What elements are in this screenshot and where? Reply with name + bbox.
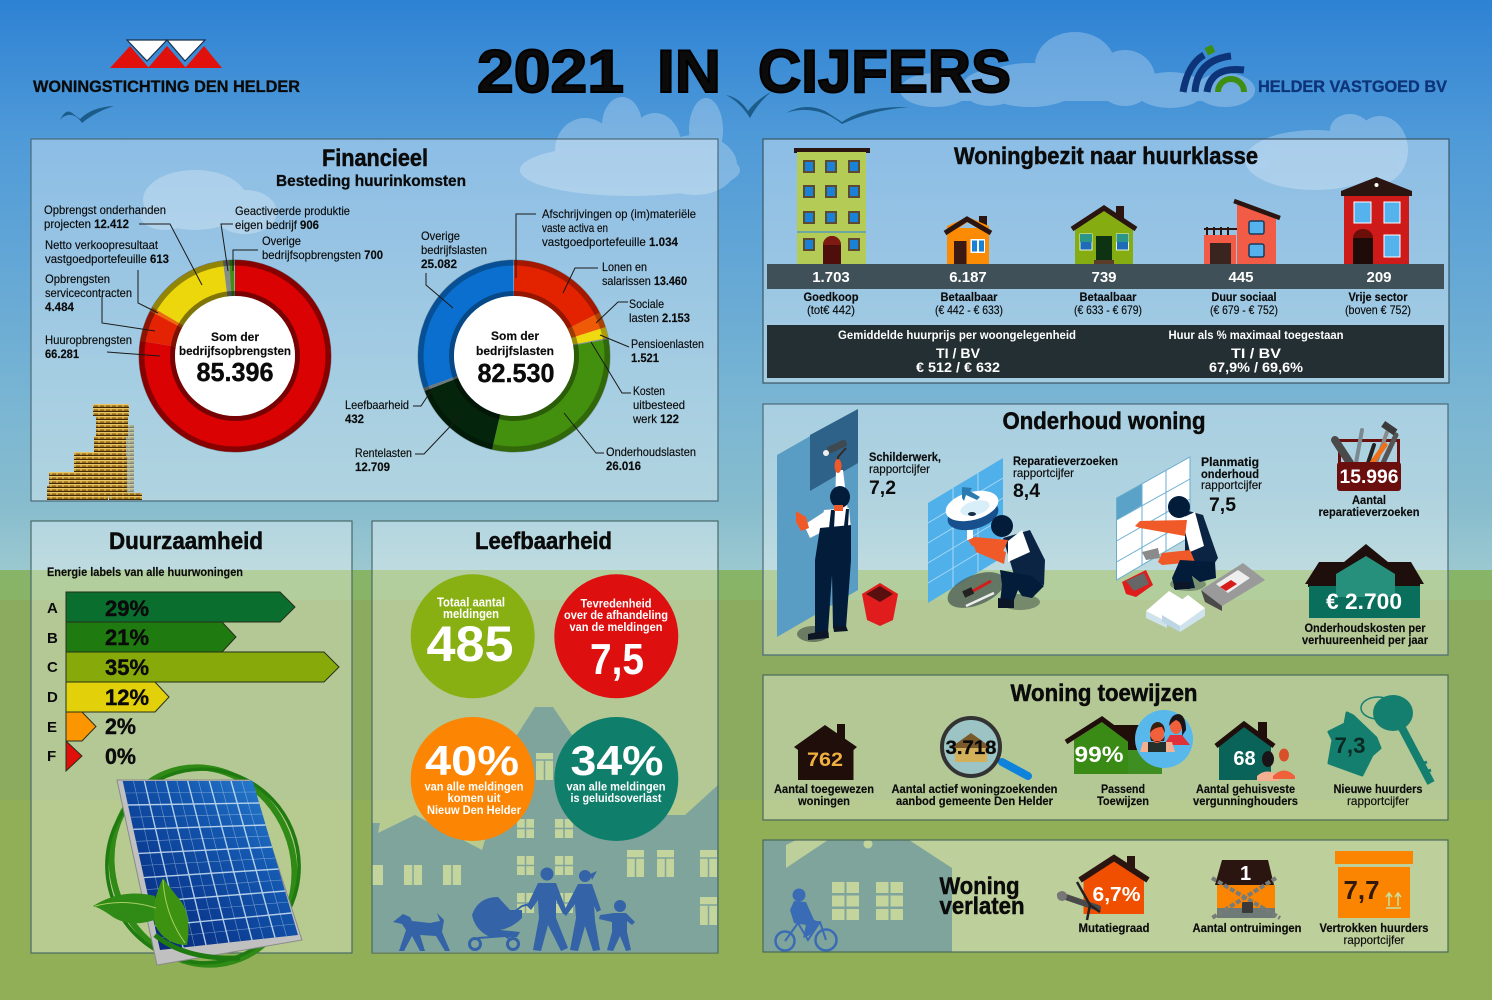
icon: green house [1072,206,1136,264]
circle: 40% Nieuw Den Helder: Nieuw Den Helder [427,803,521,817]
donut center: 82.530: 82.530 [478,358,554,388]
stat: 7,7 vertrokken huurders: 7,7 [1344,875,1380,905]
illustration: tiler [1116,457,1218,591]
text: schilderwerk: Schilderwerk, [869,450,941,464]
stat: 7,3 nieuwe huurders: 7,3 [1334,733,1366,758]
icon: modern coral house [1204,201,1280,264]
chart: energy labels: C [47,659,58,676]
chart: energy labels: F [47,748,56,765]
chart: energy labels: 35% [105,655,149,680]
stat: 7,3 nieuwe huurders: Nieuwe huurders [1334,782,1423,796]
panel: Onderhoud woning [763,404,1448,655]
number bar: 209 [1366,269,1392,286]
stat: 68 vergunninghouders [1193,722,1298,808]
illustration: plumber [928,458,1045,615]
donut center: 82.530 [476,329,554,388]
chart: energy labels: A [47,600,58,617]
text: reparatieverzoeken: Reparatieverzoeken [1013,454,1118,468]
icon: red house [1341,177,1412,264]
stat: 99% passend toewijzen: 99% [1074,742,1124,767]
donut center: 85.396: bedrijfsopbrengsten [179,344,291,358]
stat: 3.718 woningzoekenden: Aantal actief woningzoekenden [892,782,1058,796]
text: planmatig onderhoud: 7,5 [1209,495,1236,516]
icon: house € 2.700: verhuureenheid per jaar [1302,633,1428,647]
house silhouette [763,840,952,952]
circle: 40% Nieuw Den Helder [411,717,535,841]
heading: Financieel: Financieel [322,145,428,172]
icon: coin stacks [47,404,142,500]
panel: Woningbezit naar huurklasse [763,139,1449,383]
heading: Leefbaarheid: Leefbaarheid [475,528,612,555]
family silhouette [393,868,635,951]
bucket [862,583,898,626]
icon: orange house [945,216,991,264]
logo: Helder Vastgoed BV: HELDER VASTGOED BV [1258,77,1448,96]
circle: 34% geluidsoverlast: van alle meldingen [566,780,666,794]
labels: opbrengsten: bedrijfsopbrengsten 700 [262,248,383,262]
stat: 3.718 woningzoekenden: aanbod gemeente Den Helder [896,794,1053,808]
number bar [767,264,1444,289]
labels: lasten: Pensioenlasten [631,337,704,351]
labels: opbrengsten: Opbrengst onderhanden [44,203,166,217]
stat: 762 toegewezen woningen: 762 [807,750,843,771]
donut chart: bedrijfsopbrengsten [142,262,328,450]
circle: tevredenheid: over de afhandeling [564,608,668,622]
heading: Onderhoud woning: Onderhoud woning [1002,408,1206,435]
icon: house € 2.700: Onderhoudskosten per [1304,621,1426,635]
labels: opbrengsten: 4.484 [45,300,74,314]
text: planmatig onderhoud [1201,455,1262,516]
labels: lasten: vaste activa en [542,221,608,235]
labels: lasten: bedrijfslasten [421,243,487,257]
stat: 1 ontruiming: Aantal ontruimingen [1192,921,1302,935]
stat: 762 toegewezen woningen: Aantal toegewezen [774,782,874,796]
circle: 34% geluidsoverlast [554,717,678,841]
labels: lasten: 12.709 [355,460,390,474]
stat: 3.718 woningzoekenden [892,718,1058,808]
stat: 68 vergunninghouders: vergunninghouders [1193,794,1298,808]
text: reparatieverzoeken [1013,454,1118,502]
dark info box: € 512 / € 632 [916,359,1000,375]
heading: Woning verlaten [940,873,1024,920]
class labels: (€ 633 - € 679) [1074,303,1142,317]
labels: lasten: lasten 2.153 [629,311,690,325]
labels: opbrengsten: Overige [262,234,301,248]
circle: tevredenheid: 7,5 [590,635,644,684]
circle: 34% geluidsoverlast: 34% [570,737,664,784]
labels: opbrengsten: vastgoedportefeuille 613 [45,252,169,266]
icon: toolbox 15.996 [1318,421,1420,519]
labels: lasten: 432 [345,412,364,426]
heading: Woning verlaten: verlaten [940,893,1024,920]
labels: opbrengsten: Geactiveerde produktie [235,204,350,218]
donut chart: bedrijfslasten [420,262,608,450]
labels: lasten: Rentelasten [355,446,412,460]
stat: 99% passend toewijzen: Passend [1101,782,1145,796]
class labels: (€ 442 - € 633) [935,303,1003,317]
class labels: Duur sociaal [1212,290,1276,304]
title: 2021 [477,38,624,105]
chart: energy labels: 21% [105,625,149,650]
chart: energy labels: 0% [105,744,136,769]
stat: 7,7 vertrokken huurders [1320,851,1429,947]
icon: house € 2.700: € 2.700 [1326,589,1402,614]
text: planmatig onderhoud: rapportcijfer [1201,478,1262,492]
icon: toolbox 15.996: Aantal [1352,493,1386,507]
panel: Woning verlaten [763,840,1448,952]
stat: 6,7% mutatiegraad: 6,7% [1092,884,1141,906]
panel: Duurzaamheid [31,521,352,992]
chart: energy labels: 29% [105,596,149,621]
icon: flat building [794,148,870,264]
labels: lasten: Overige [421,229,460,243]
icon: house € 2.700 [1302,544,1428,647]
circle: 40% Nieuw Den Helder: van alle meldingen [424,780,524,794]
labels: lasten [345,207,704,474]
circle: tevredenheid [554,574,678,698]
heading: Woning toewijzen: Woning toewijzen [1010,680,1198,707]
panel: Leefbaarheid [372,521,718,953]
text: planmatig onderhoud: onderhoud [1201,467,1259,481]
logo: Woningstichting Den Helder [33,40,300,96]
title: IN [657,38,721,105]
town silhouette [372,707,718,952]
stat: 99% passend toewijzen: Toewijzen [1097,794,1149,808]
chart: energy labels: 2% [105,714,136,739]
number bar: 1.703 [812,269,850,286]
chart: energy labels: D [47,689,58,706]
labels: lasten: uitbesteed [633,398,685,412]
class labels: (tot€ 442) [807,303,855,317]
class labels: Vrije sector [1348,290,1408,304]
text: schilderwerk: 7,2 [869,478,896,499]
donut center: 82.530: Som der [491,329,539,343]
labels: lasten: Lonen en [602,260,647,274]
panel: Woning toewijzen [763,675,1448,820]
labels: lasten: Afschrijvingen op (im)materiële [542,207,696,221]
birds [60,92,909,124]
labels: opbrengsten [44,203,383,361]
dark info box: Huur als % maximaal toegestaan [1168,330,1344,342]
labels: opbrengsten: 66.281 [45,347,79,361]
subheading: energielabels: Energie labels van alle huurwoningen [47,565,243,579]
text: schilderwerk: rapportcijfer [869,462,930,476]
class labels: (boven € 752) [1345,303,1411,317]
text: planmatig onderhoud: Planmatig [1201,455,1259,469]
stat: 1 ontruiming: 1 [1240,863,1251,885]
stat: 1 ontruiming [1192,860,1302,935]
panel: Financieel [31,139,718,501]
stat: 762 toegewezen woningen: woningen [797,794,850,808]
circle: tevredenheid: Tevredenheid [580,596,652,610]
labels: lasten: 25.082 [421,257,457,271]
circle: tevredenheid: van de meldingen [570,620,662,634]
icon: cyclist [776,888,836,950]
icon: solar panel with leaves [78,740,328,992]
dark info box: TI / BV [1231,345,1282,361]
title: CIJFERS [758,38,1011,105]
stat: 762 toegewezen woningen [774,724,874,808]
heading: Woning verlaten: Woning [940,873,1020,900]
text: reparatieverzoeken: rapportcijfer [1013,466,1074,480]
circle: 34% geluidsoverlast: is geluidsoverlast [570,791,662,805]
heading: Woningbezit: Woningbezit naar huurklasse [954,143,1258,170]
stat: 7,7 vertrokken huurders: Vertrokken huurders [1320,921,1429,935]
text: reparatieverzoeken: 8,4 [1013,481,1040,502]
circle: totaal aantal meldingen: 485 [426,616,514,672]
labels: opbrengsten: Huuropbrengsten [45,333,132,347]
stat: 7,7 vertrokken huurders: rapportcijfer [1344,933,1405,947]
dark info box: Gemiddelde huurprijs per woongelegenheid [838,330,1076,342]
circle: 40% Nieuw Den Helder: 40% [425,737,519,784]
labels: opbrengsten: Opbrengsten [45,272,110,286]
labels: lasten: 26.016 [606,459,641,473]
icon: toolbox 15.996: reparatieverzoeken [1318,505,1420,519]
title [477,38,1011,105]
chart: energy labels: 12% [105,685,149,710]
circle: totaal aantal meldingen: Totaal aantal [437,596,505,610]
dark info box: 67,9% / 69,6% [1209,359,1304,375]
heading: Duurzaamheid: Duurzaamheid [109,528,263,555]
donut center: 85.396: Som der [211,330,259,344]
tile tools: bucket, tile stacks and machine [1122,563,1265,632]
dark info box: TI / BV [936,345,981,361]
labels: lasten: Kosten [633,384,665,398]
number bar: 445 [1228,269,1254,286]
stat: 68 vergunninghouders: Aantal gehuisveste [1196,782,1295,796]
class labels [804,290,1411,317]
number bar: 6.187 [949,269,987,286]
labels: opbrengsten: projecten 12.412 [44,217,129,231]
illustration: painter [777,409,858,642]
class labels: Betaalbaar [1080,290,1137,304]
labels: lasten: Onderhoudslasten [606,445,696,459]
labels: lasten: Sociale [629,297,664,311]
circle: totaal aantal meldingen [411,574,535,698]
labels: opbrengsten: eigen bedrijf 906 [235,218,319,232]
stat: 7,3 nieuwe huurders: rapportcijfer [1347,794,1409,808]
stat: 6,7% mutatiegraad: Mutatiegraad [1078,921,1150,935]
class labels: Goedkoop [804,290,858,304]
subheading: Besteding huurinkomsten [276,173,466,190]
donut center: 82.530: bedrijfslasten [476,344,554,358]
labels: opbrengsten: Netto verkoopresultaat [45,238,159,252]
labels: lasten: salarissen 13.460 [602,274,687,288]
logo: Helder Vastgoed BV [1183,45,1448,96]
circle: totaal aantal meldingen: meldingen [443,607,499,621]
chart: energy labels [47,592,339,771]
icon: toolbox 15.996: 15.996 [1340,467,1398,488]
labels: lasten: 1.521 [631,351,659,365]
labels: lasten: vastgoedportefeuille 1.034 [542,235,678,249]
class labels: (€ 679 - € 752) [1210,303,1278,317]
stat: 3.718 woningzoekenden: 3.718 [946,738,996,759]
stat: 7,3 nieuwe huurders [1329,695,1431,808]
circle: 40% Nieuw Den Helder: komen uit [448,791,501,805]
labels: lasten: Leefbaarheid [345,398,409,412]
labels: opbrengsten: servicecontracten [45,286,132,300]
chart: energy labels: B [47,630,58,647]
donut center: 85.396 [179,330,291,387]
labels: lasten: werk 122 [632,412,679,426]
logo: Woningstichting Den Helder: WONINGSTICHTING DEN HELDER [33,77,300,96]
stat: 99% passend toewijzen [1066,710,1193,808]
chart: energy labels: E [47,719,57,736]
stat: 6,7% mutatiegraad [1057,856,1150,935]
number bar: 739 [1091,269,1117,286]
stat: 68 vergunninghouders: 68 [1233,748,1256,770]
text: schilderwerk [869,450,941,499]
class labels: Betaalbaar [940,290,998,304]
dark info box [767,325,1444,378]
donut center: 85.396: 85.396 [196,357,274,387]
